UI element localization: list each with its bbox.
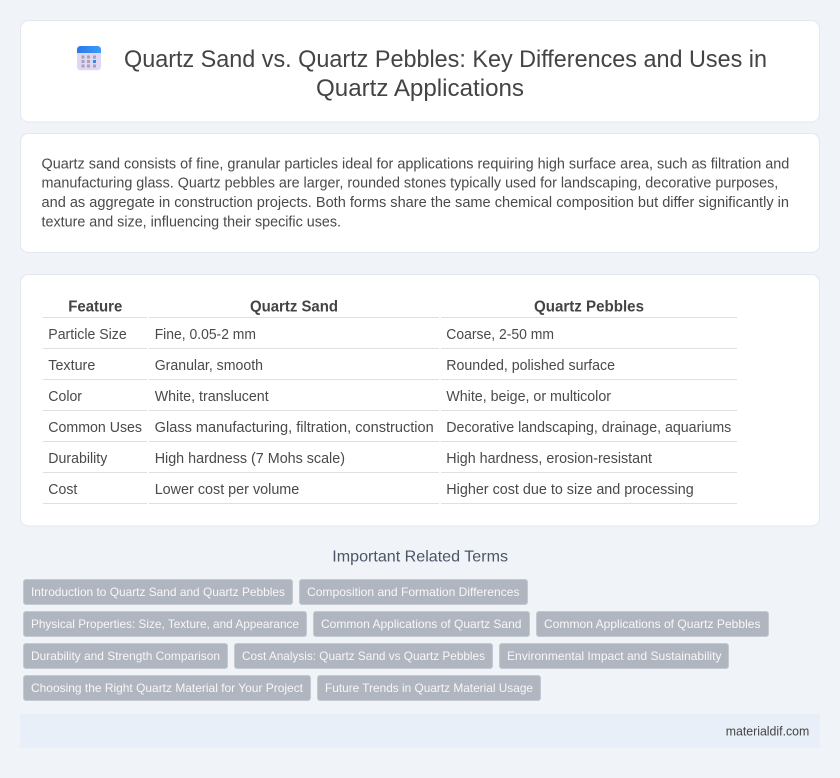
row: cost: [48, 482, 694, 498]
tag: physical properties: Physical Properties: Size, Texture, and Appearance: [31, 617, 299, 631]
tag: introduction: [24, 580, 292, 604]
row: durability: [48, 451, 652, 467]
row: particle size: Coarse, 2-50 mm: [446, 327, 554, 343]
panel: title card: [20, 20, 820, 122]
table header: Quartz Pebbles: [534, 299, 644, 316]
tag: applications of pebbles: [536, 612, 768, 636]
tag: composition: [300, 580, 528, 604]
title: [124, 46, 767, 102]
row: common uses: [48, 420, 731, 436]
row: particle size: [48, 327, 554, 343]
title: Quartz Sand vs. Quartz Pebbles: Key Differences and Uses in: [124, 46, 767, 73]
row: texture: [48, 358, 615, 374]
row: cost: Lower cost per volume: [155, 482, 299, 498]
row: durability: High hardness, erosion-resistant: [446, 451, 652, 467]
table header: Feature: [68, 299, 122, 316]
heading: important related terms: Important Related Terms: [332, 549, 508, 566]
intro paragraph: manufacturing glass. Quartz pebbles are larger, rounded stones typically used for landscaping, decorative purposes,: [42, 176, 778, 192]
row: color: Color: [48, 389, 82, 405]
panel: introduction: [20, 134, 820, 252]
icon: calendar: [77, 46, 101, 70]
tag: durability: [24, 644, 228, 668]
tag: applications of sand: Common Applications of Quartz Sand: [321, 617, 522, 631]
intro paragraph: texture and size, influencing their specific uses.: [42, 214, 341, 230]
tag: cost analysis: [234, 644, 492, 668]
row: particle size: Fine, 0.05-2 mm: [155, 327, 256, 343]
row: texture: Granular, smooth: [155, 358, 263, 374]
row: color: [48, 389, 611, 405]
row: common uses: Decorative landscaping, drainage, aquariums: [446, 420, 731, 436]
row: durability: Durability: [48, 451, 108, 467]
row: particle size: Particle Size: [48, 327, 127, 343]
intro paragraph: and as aggregate in construction projects. Both forms share the same chemical composition but differ significantly in: [42, 195, 789, 211]
tag: applications of sand: [314, 612, 530, 636]
row: durability: High hardness (7 Mohs scale): [155, 451, 345, 467]
tag: applications of pebbles: Common Applications of Quartz Pebbles: [544, 617, 760, 631]
row: cost: Higher cost due to size and processing: [446, 482, 694, 498]
panel: comparison table: [20, 274, 820, 526]
title: Quartz Applications: [316, 75, 524, 102]
footer source: materialdif.com: [726, 724, 809, 738]
row: texture: Texture: [48, 358, 95, 374]
row: common uses: Glass manufacturing, filtration, construction: [155, 420, 434, 436]
row: color: White, translucent: [155, 389, 269, 405]
table header: Quartz Sand: [250, 299, 338, 316]
tag: composition: Composition and Formation Differences: [307, 585, 520, 599]
row: color: White, beige, or multicolor: [446, 389, 611, 405]
row: cost: Cost: [48, 482, 77, 498]
tag: future trends: [318, 676, 540, 700]
related terms tags: [24, 580, 768, 700]
row: common uses: Common Uses: [48, 420, 142, 436]
footer: [20, 714, 820, 748]
intro paragraph: [42, 156, 789, 230]
intro paragraph: Quartz sand consists of fine, granular particles ideal for applications requiring high surface area, such as filtration and: [42, 156, 789, 172]
row: texture: Rounded, polished surface: [446, 358, 615, 374]
table header: [68, 299, 644, 316]
tag: durability: Durability and Strength Comparison: [31, 649, 220, 663]
tag: future trends: Future Trends in Quartz Material Usage: [325, 681, 533, 695]
tag: cost analysis: Cost Analysis: Quartz Sand vs Quartz Pebbles: [242, 649, 485, 663]
tag: introduction: Introduction to Quartz Sand and Quartz Pebbles: [31, 585, 285, 599]
tag: environmental impact: Environmental Impact and Sustainability: [507, 649, 722, 663]
tag: environmental impact: [500, 644, 728, 668]
tag: choosing material: [24, 676, 310, 700]
tag: physical properties: [24, 612, 306, 636]
tag: choosing material: Choosing the Right Quartz Material for Your Project: [31, 681, 304, 695]
